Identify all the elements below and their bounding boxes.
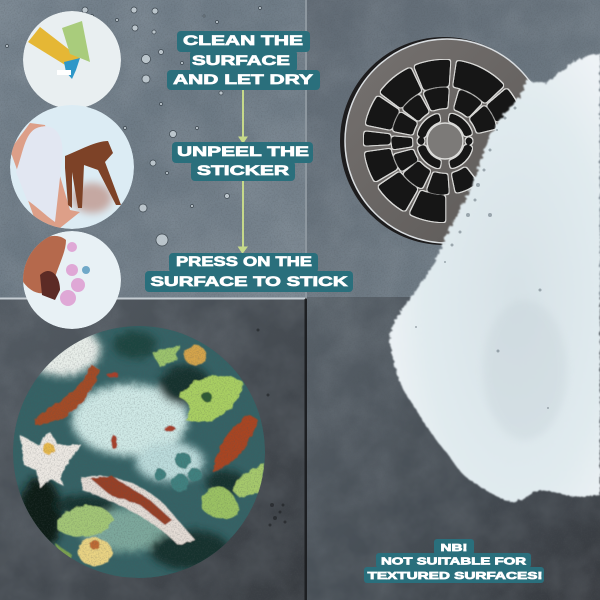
label: unpeel the sticker: UNPEEL THE: [177, 143, 309, 159]
flow arrows: [238, 88, 247, 253]
yellow lotus: [78, 538, 112, 566]
note: not suitable for textured surfaces: [364, 539, 544, 583]
label: clean the surface and let dry: AND LET DRY: [173, 71, 314, 87]
note: not suitable for textured surfaces: NB!: [440, 542, 468, 554]
koi pond round sticker: [13, 324, 265, 578]
lily pads: [178, 376, 243, 422]
label: clean the surface and let dry: CLEAN THE: [183, 32, 303, 48]
label: press on the surface to stick: SURFACE TO STICK: [150, 273, 348, 289]
note: not suitable for textured surfaces: TEXTURED SURFACES!: [368, 570, 542, 582]
label: unpeel the sticker: [172, 142, 313, 181]
step 3 photo: pressing the sticker: [22, 231, 121, 329]
step 1 photo: cleaning the surface: [23, 11, 121, 109]
small red fish: [107, 372, 176, 449]
note: not suitable for textured surfaces: NOT SUITABLE FOR: [381, 556, 527, 568]
drain: [340, 37, 549, 245]
label: clean the surface and let dry: [167, 31, 320, 90]
dark round pads in water: [154, 452, 202, 492]
step 2 photo: peeling the sticker: [10, 105, 134, 232]
soap foam: [390, 53, 600, 502]
label: unpeel the sticker: STICKER: [197, 162, 289, 178]
drain holes: [377, 73, 513, 209]
label: press on the surface to stick: [145, 253, 353, 292]
water droplets: [6, 6, 262, 246]
white lotus: [20, 432, 82, 488]
label: clean the surface and let dry: SURFACE: [192, 52, 290, 68]
koi fish: [35, 365, 100, 425]
pale water wash: [18, 324, 245, 570]
label: press on the surface to stick: PRESS ON THE: [176, 253, 312, 269]
